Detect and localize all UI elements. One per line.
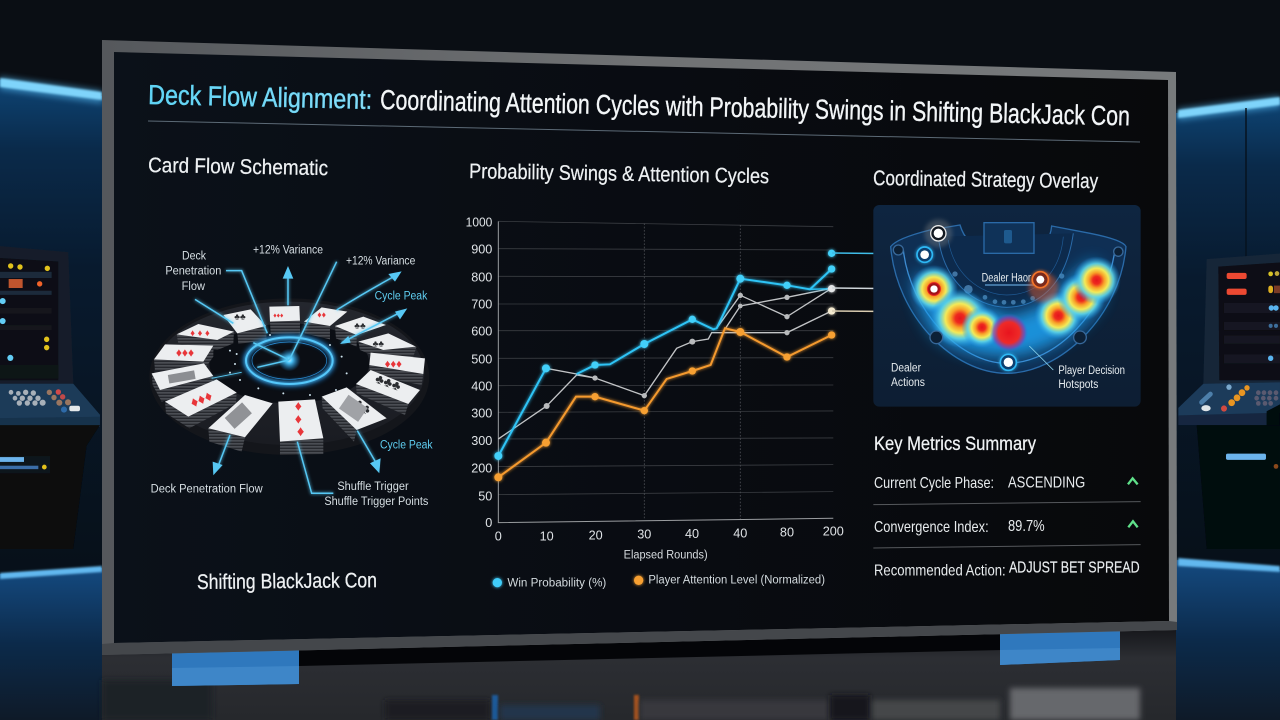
panel: strategy overlay [873,205,1141,407]
x axis title: Elapsed Rounds) [624,547,708,561]
card stacks [152,306,425,455]
y axis labels: 50 [478,490,492,504]
flow labels [151,243,434,508]
overlay labels [891,271,1125,391]
metric: current cycle phase: Current Cycle Phase: [874,475,994,492]
metric: convergence index: Convergence Index: [874,519,989,536]
card stacks: ♦ [295,398,302,414]
y axis labels: 400 [471,379,492,393]
gray series [498,288,832,439]
heading: card flow schematic: Card Flow Schematic [148,154,328,180]
caption: shifting blackjack con: Shifting BlackJack Con [197,569,377,594]
card stacks: ♣♣ [226,405,249,428]
heading: coordinated strategy overlay: Coordinated Strategy Overlay [873,167,1099,193]
overlay labels: Dealer Haor [982,271,1031,285]
panel: key metrics [873,434,1141,579]
card stacks: ♦♦♦ [273,312,284,319]
flow labels: +12% Variance [346,253,416,267]
heading: probability swings: Probability Swings & Attention Cycles [469,160,769,188]
x axis labels: 20 [589,528,603,542]
card stacks: ♦ ♦ ♦ [190,328,210,338]
monitor bezel [102,40,1177,655]
grid lines [498,221,833,523]
card stacks: ♣♣ [354,320,366,330]
flow labels: Cycle Peak [380,438,434,452]
overlay labels: Hotspots [1058,377,1098,391]
flow labels: Penetration [165,264,221,278]
line chart [466,215,844,590]
x axis labels: 30 [637,528,651,542]
x axis labels: 10 [540,529,554,543]
flow labels: +12% Variance [253,243,323,257]
card stacks: ♣♣♣ [373,371,403,394]
corner studs [893,245,1123,344]
floor and reflections [102,625,1176,720]
y axis labels [466,215,492,530]
x axis labels [495,525,844,543]
title [148,79,1130,131]
legend: Win Probability (%) [507,576,606,590]
flow labels: Shuffle Trigger [337,479,409,493]
left control console [0,246,100,549]
x axis labels: 80 [780,526,794,540]
flow labels: Shuffle Trigger Points [324,494,428,508]
card stacks: ♣♣ [351,395,374,418]
metric: current cycle phase [874,474,1138,492]
card stacks: ♦♦♦ [385,358,402,370]
flow labels: Cycle Peak [375,289,428,303]
flow labels: Deck [182,248,207,262]
overlay labels: Player Decision [1058,363,1125,377]
y axis labels: 600 [471,325,492,339]
metrics heading: Key Metrics Summary [874,434,1036,455]
y axis labels: 700 [471,298,492,312]
monitor stand [172,624,1120,686]
y axis labels: 0 [485,516,492,530]
x axis labels: 0 [495,529,502,543]
flow arrows [195,262,402,493]
card stacks: ♦♦ [317,309,327,319]
y axis labels: 200 [471,462,492,476]
metric: convergence index: 89.7% [1008,518,1045,535]
right control console [1178,254,1280,549]
x axis labels: 40 [685,527,699,541]
card stacks: ♦♦♦ [176,346,194,360]
card stacks: ♣♣ [234,311,246,321]
card stacks: ♦ [297,424,304,440]
markers [917,219,1048,370]
card flow schematic [149,243,434,508]
callout line [1029,346,1053,370]
metric: recommended action: ADJUST BET SPREAD [1009,560,1140,577]
blackjack table outline [891,225,1126,373]
legend: Player Attention Level (Normalized) [648,572,825,586]
y axis labels: 300 [471,406,492,420]
deck ring base [149,298,429,455]
metric: convergence index [874,518,1138,536]
card stacks: ♣♣ [373,339,384,349]
monitor screen [114,52,1169,643]
overlay labels: Actions [891,375,925,389]
y axis labels: 500 [471,352,492,366]
heat glow [913,260,1104,357]
card stacks: ♦ [295,410,302,426]
heat spots [910,256,1121,352]
title: Deck Flow Alignment: [148,79,372,115]
arrow heads [213,266,407,475]
y axis labels: 1000 [466,215,492,229]
x axis labels: 40 [733,526,747,540]
centre glowing ring [229,334,348,396]
flow labels: Deck Penetration Flow [151,482,263,496]
legend [493,572,825,590]
metric: recommended action: Recommended Action: [874,562,1006,579]
connector lines [832,253,950,312]
y axis labels: 300 [471,434,492,448]
metric: current cycle phase: ASCENDING [1008,474,1085,491]
end markers [828,285,835,315]
y axis labels: 800 [471,270,492,284]
card stacks: ♦♦♦ [188,388,215,412]
metric: recommended action [874,560,1140,579]
blue series: win probability [494,250,835,460]
overlay labels: Dealer [891,360,921,374]
betting marks [952,271,1064,305]
y axis labels: 900 [471,243,492,257]
orange series: player attention [494,328,835,481]
flow labels: Flow [182,279,205,293]
dealer tray [984,223,1034,253]
x axis labels: 200 [823,525,844,539]
